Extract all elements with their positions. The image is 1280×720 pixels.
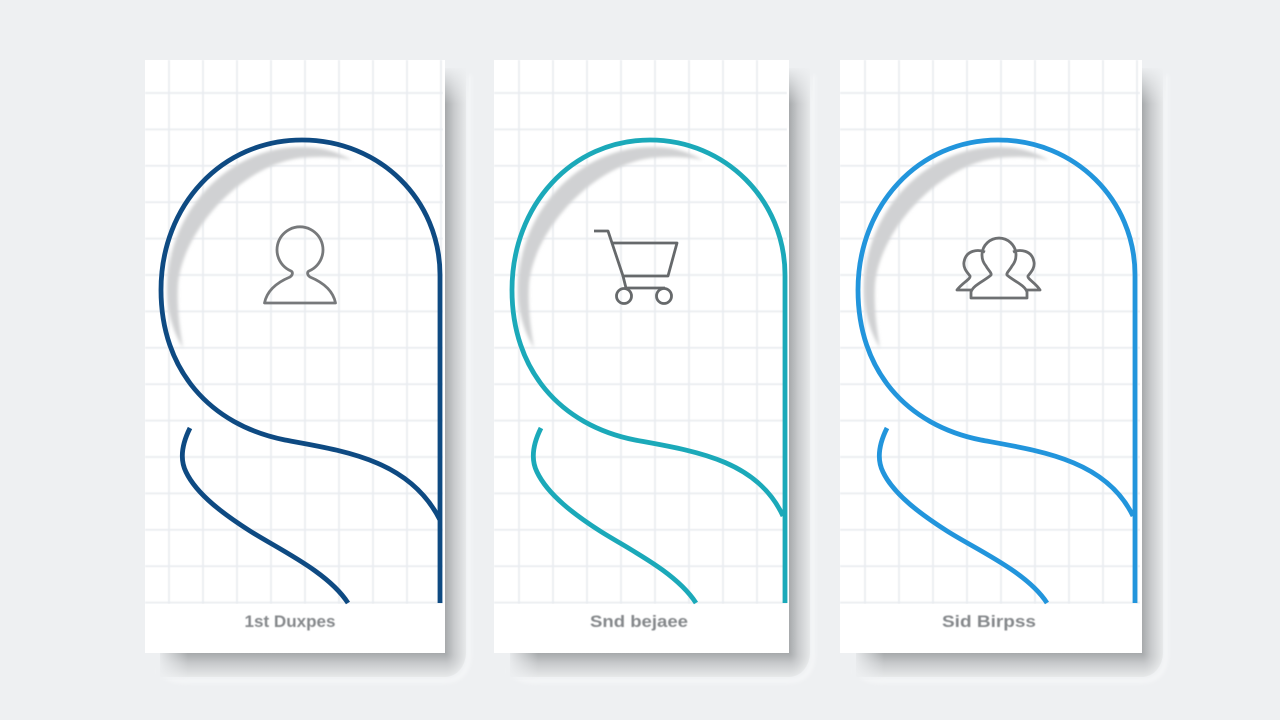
icon: person [264,227,336,303]
tail curve [879,428,1047,603]
inner crescent shadow [518,147,703,348]
inner crescent shadow [167,147,352,348]
outline curve [858,140,1135,603]
inner crescent shadow [864,147,1049,348]
tail curve [182,428,348,603]
card shadow [852,66,1166,681]
label: Snd bejaee [590,612,688,631]
panel: second card [494,60,813,681]
outline curve [512,140,785,603]
outline curve [161,140,440,603]
grid [840,60,1140,604]
icon: group of people [957,238,1040,298]
grid [494,60,787,604]
card surface [145,60,445,653]
icon: shopping cart [594,231,677,304]
card shadow [506,66,813,681]
card shadow [156,66,469,681]
card surface [840,60,1142,653]
card surface [494,60,789,653]
panel: third card [840,60,1166,681]
label: Sid Birpss [942,612,1036,631]
panel: first card [145,60,469,681]
tail curve [533,428,696,603]
label: 1st Duxpes [244,612,336,631]
grid [145,60,443,604]
